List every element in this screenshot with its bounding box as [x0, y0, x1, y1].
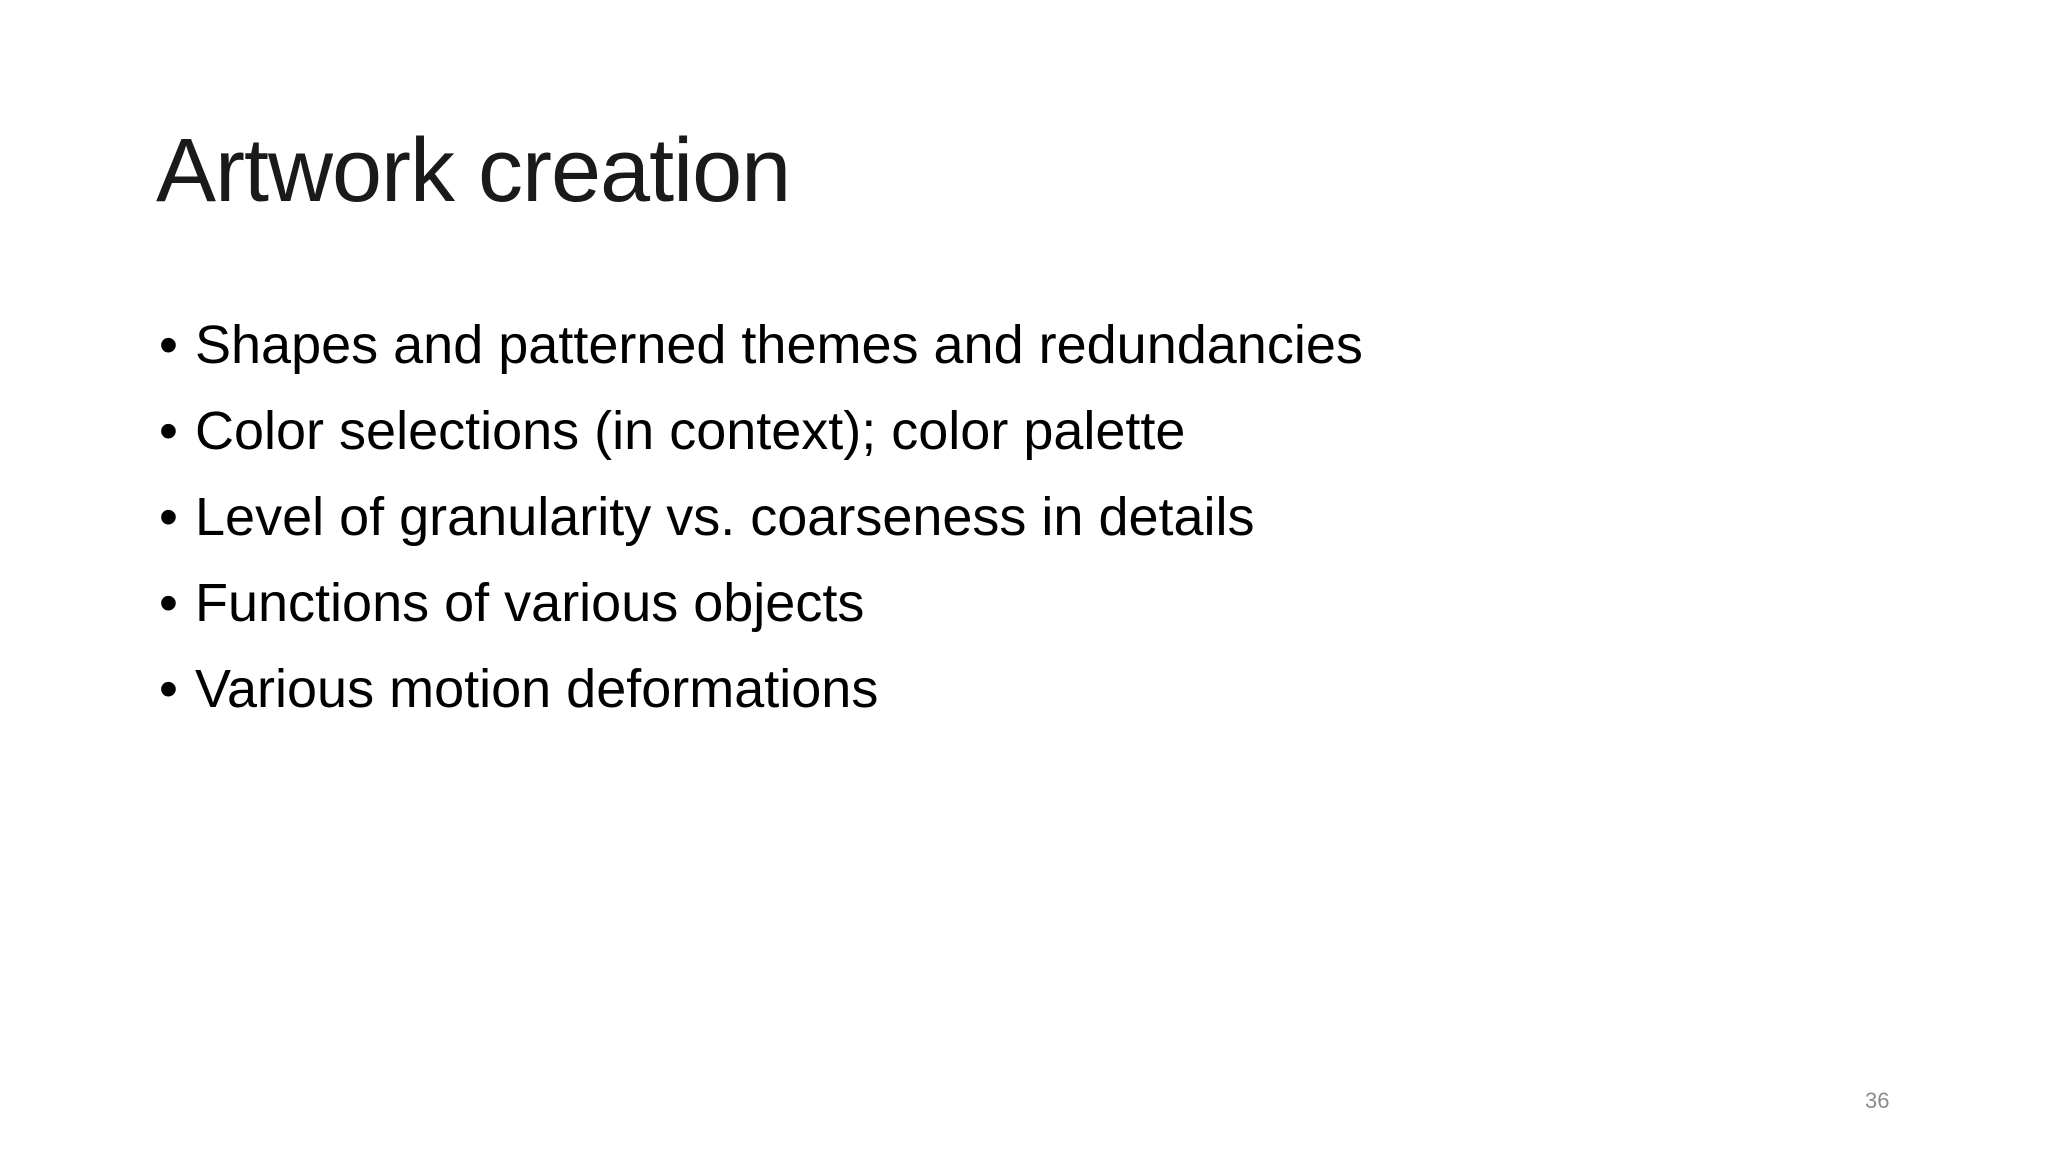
bullet: shapes: •	[159, 315, 178, 375]
bullet list	[159, 315, 1363, 719]
bullet: color: Color selections (in context); color palette	[195, 401, 1185, 461]
bullet: motion: Various motion deformations	[195, 659, 878, 719]
title: Artwork creation	[156, 121, 790, 221]
bullet: granularity: •	[159, 487, 178, 547]
bullet: shapes: Shapes and patterned themes and redundancies	[195, 315, 1363, 375]
bullet: granularity: Level of granularity vs. coarseness in details	[195, 487, 1255, 547]
page number: 36	[1865, 1088, 1889, 1113]
bullet: motion: •	[159, 659, 178, 719]
bullet: functions: Functions of various objects	[195, 573, 864, 633]
bullet: functions: •	[159, 573, 178, 633]
bullet: color: •	[159, 401, 178, 461]
